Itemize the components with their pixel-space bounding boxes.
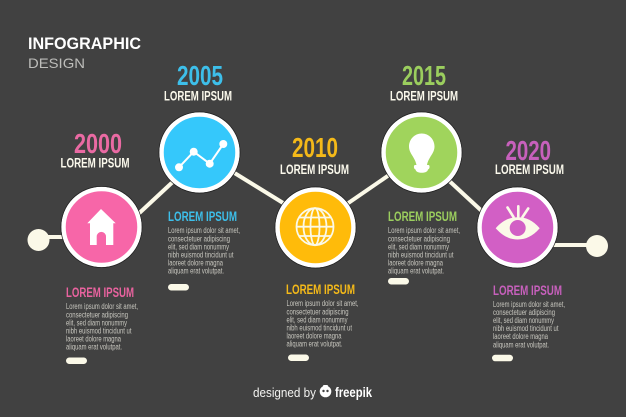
- milestone 2010: [275, 132, 358, 361]
- description 2005: [168, 209, 240, 276]
- pill 2010: [288, 354, 309, 361]
- label 2010: LOREM IPSUM: [280, 162, 349, 177]
- description 2000: aliquam erat volutpat.: [66, 343, 122, 352]
- timeline end dot: [586, 235, 608, 257]
- description 2010: Lorem ipsum dolor sit amet,: [286, 299, 358, 308]
- label 2000: LOREM IPSUM: [60, 156, 130, 170]
- description 2000: elit, sed diam nonummy: [66, 318, 127, 327]
- description 2020: elit, sed diam nonummy: [493, 316, 554, 325]
- credit: designed by freepik: [253, 385, 372, 400]
- description 2010: elit, sed diam nonummy: [286, 315, 348, 324]
- description 2005: Lorem ipsum dolor sit amet,: [168, 226, 240, 235]
- timeline connectors: [38, 169, 597, 245]
- credit: designed by freepik: designed by: [253, 386, 317, 400]
- description 2015: consectetuer adipiscing: [388, 234, 450, 243]
- milestone 2020: [477, 135, 565, 361]
- description 2015: nibh euismod tincidunt ut: [388, 250, 454, 260]
- circle 2015: [381, 112, 462, 193]
- description 2010: [286, 282, 358, 349]
- year 2015: 2015: [402, 60, 446, 91]
- description 2010: nibh euismod tincidunt ut: [286, 324, 353, 332]
- icon: house: [87, 209, 116, 245]
- circle 2010: [275, 187, 356, 268]
- description 2015: aliquam erat volutpat.: [388, 267, 444, 276]
- description 2005: consectetuer adipiscing: [168, 234, 230, 243]
- description 2000: LOREM IPSUM: [66, 285, 134, 300]
- description 2020: laoreet dolore magna: [493, 332, 548, 341]
- title: [28, 34, 141, 71]
- title: INFOGRAPHIC: [28, 34, 141, 53]
- label 2020: LOREM IPSUM: [495, 162, 564, 177]
- circle 2000: [61, 186, 142, 268]
- description 2000: Lorem ipsum dolor sit amet,: [66, 302, 138, 311]
- pill 2005: [168, 284, 189, 290]
- pill 2000: [66, 358, 87, 364]
- description 2015: [388, 209, 460, 276]
- timeline start dot: [28, 229, 50, 251]
- year 2020: 2020: [506, 135, 551, 166]
- icon: eye: [496, 206, 540, 240]
- label 2005: LOREM IPSUM: [164, 88, 232, 104]
- description 2010: LOREM IPSUM: [286, 282, 355, 297]
- milestone 2000: [60, 128, 142, 364]
- description 2005: LOREM IPSUM: [168, 209, 237, 224]
- icon: globe: [296, 208, 334, 245]
- pill 2020: [492, 355, 513, 361]
- pill 2015: [388, 278, 409, 284]
- description 2010: consectetuer adipiscing: [286, 307, 348, 316]
- milestone 2015: [381, 60, 462, 284]
- icon: light bulb: [409, 134, 434, 173]
- description 2010: aliquam erat volutpat.: [286, 340, 342, 349]
- description 2005: nibh euismod tincidunt ut: [168, 250, 234, 260]
- description 2020: [493, 283, 565, 349]
- description 2005: aliquam erat volutpat.: [168, 267, 224, 276]
- year 2000: 2000: [74, 128, 122, 159]
- description 2005: elit, sed diam nonummy: [168, 242, 229, 251]
- description 2015: elit, sed diam nonummy: [388, 242, 449, 251]
- milestone 2005: [159, 60, 240, 290]
- description 2020: nibh euismod tincidunt ut: [493, 324, 559, 333]
- title: DESIGN: [28, 55, 85, 71]
- description 2015: Lorem ipsum dolor sit amet,: [388, 226, 460, 235]
- description 2000: nibh euismod tincidunt ut: [66, 326, 132, 336]
- credit: designed by freepik: freepik: [335, 385, 372, 400]
- description 2000: consectetuer adipiscing: [66, 310, 128, 319]
- description 2020: consectetuer adipiscing: [493, 308, 555, 317]
- icon: line chart: [175, 140, 227, 171]
- description 2020: Lorem ipsum dolor sit amet,: [493, 300, 565, 309]
- circle 2020: [477, 187, 558, 268]
- description 2020: aliquam erat volutpat.: [493, 340, 549, 349]
- icon: freepik mark: [320, 385, 331, 397]
- description 2000: laoreet dolore magna: [66, 335, 121, 344]
- description 2020: LOREM IPSUM: [493, 283, 562, 298]
- year 2005: 2005: [177, 60, 223, 91]
- circle 2005: [159, 112, 240, 193]
- description 2015: LOREM IPSUM: [388, 209, 457, 224]
- description 2005: laoreet dolore magna: [168, 259, 223, 268]
- year 2010: 2010: [292, 132, 338, 163]
- description 2010: laoreet dolore magna: [286, 332, 342, 341]
- description 2015: laoreet dolore magna: [388, 259, 443, 268]
- description 2000: [66, 285, 138, 352]
- label 2015: LOREM IPSUM: [390, 88, 458, 104]
